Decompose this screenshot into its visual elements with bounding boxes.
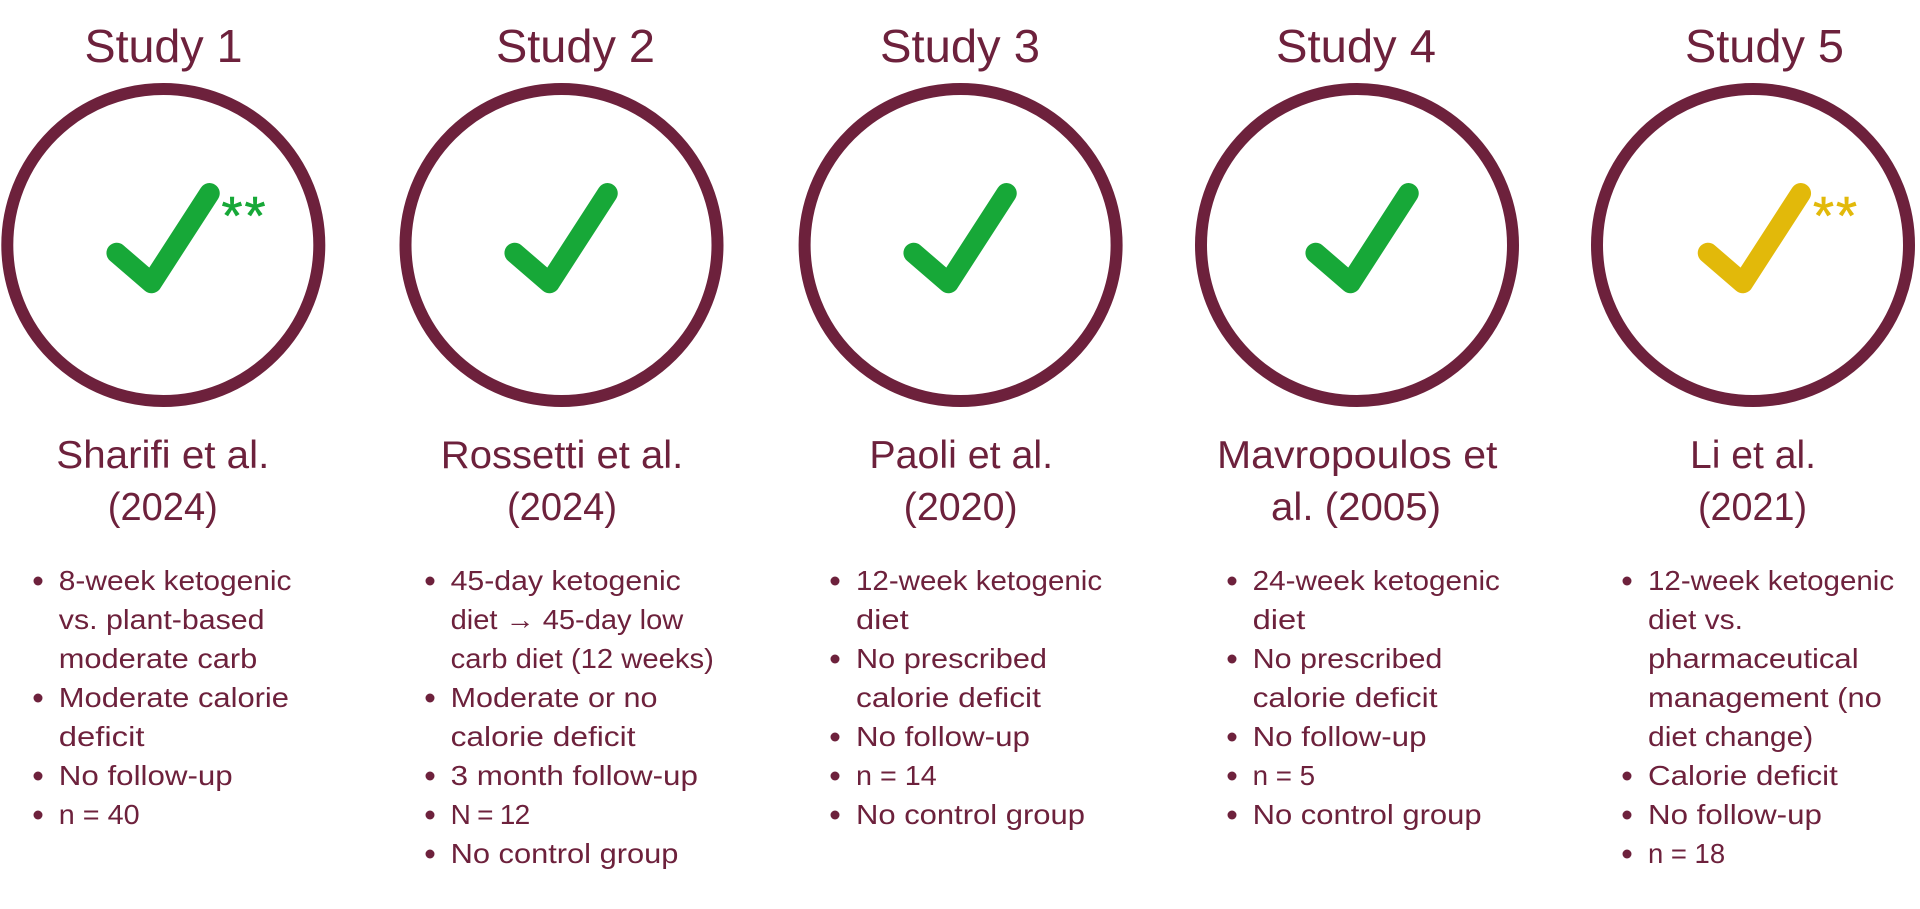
author: Paoli et al. (2020): (2020) xyxy=(904,486,1018,529)
icon: green check in ring xyxy=(805,89,1117,401)
study details list: diet vs. xyxy=(1648,604,1743,635)
study details list xyxy=(1228,565,1500,830)
study details list: diet xyxy=(1253,604,1306,635)
study details list: pharmaceutical xyxy=(1648,643,1859,674)
study details list xyxy=(34,565,292,830)
study details list: No control group xyxy=(856,799,1085,830)
study details list xyxy=(830,565,1102,830)
icon: green check in ring xyxy=(406,89,718,401)
heading: Study 4: Study 4 xyxy=(1276,20,1436,72)
study details list: No prescribed xyxy=(1253,643,1442,674)
author: Paoli et al. (2020): Paoli et al. xyxy=(869,434,1053,477)
icon: green check in ring with asterisks: ** xyxy=(222,186,266,246)
author: Sharifi et al. (2024): (2024) xyxy=(108,486,218,529)
study details list: diet change) xyxy=(1648,721,1813,752)
author: Paoli et al. (2020) xyxy=(869,434,1053,529)
study details list: No follow-up xyxy=(1253,721,1426,752)
study details list: calorie deficit xyxy=(856,682,1041,713)
study details list: n = 14 xyxy=(856,760,937,791)
author: Li et al. (2021): (2021) xyxy=(1698,486,1807,529)
icon: green check in ring xyxy=(1201,89,1513,401)
author: Li et al. (2021): Li et al. xyxy=(1690,434,1816,477)
panel: study 4 xyxy=(1201,20,1513,830)
study details list: Calorie deficit xyxy=(1648,760,1838,791)
icon: green check in ring with asterisks xyxy=(7,89,319,401)
study details list: Moderate or no xyxy=(451,682,658,713)
study details list: No follow-up xyxy=(59,760,233,791)
study details list: calorie deficit xyxy=(1253,682,1438,713)
study details list: 3 month follow-up xyxy=(451,760,698,791)
study details list: carb diet (12 weeks) xyxy=(451,643,714,674)
study details list: No follow-up xyxy=(1648,799,1822,830)
study details list: calorie deficit xyxy=(451,721,636,752)
panel: study 2 xyxy=(406,20,718,869)
icon: yellow check in ring with asterisks: ** xyxy=(1813,186,1857,246)
study details list: Moderate calorie xyxy=(59,682,289,713)
author: Rossetti et al. (2024): Rossetti et al. xyxy=(441,434,683,477)
study details list: N = 12 xyxy=(451,799,530,830)
study details list: No prescribed xyxy=(856,643,1047,674)
study details list xyxy=(426,565,714,869)
study details list: n = 5 xyxy=(1253,760,1315,791)
heading: Study 2: Study 2 xyxy=(496,20,655,72)
study details list: moderate carb xyxy=(59,643,257,674)
study details list: 12-week ketogenic xyxy=(1648,565,1894,596)
author: Rossetti et al. (2024): (2024) xyxy=(507,486,617,529)
study details list: deficit xyxy=(59,721,145,752)
author: Li et al. (2021) xyxy=(1690,434,1816,529)
author: Mavropoulos et al. (2005) xyxy=(1217,434,1498,529)
author: Mavropoulos et al. (2005): al. (2005) xyxy=(1271,486,1441,529)
author: Rossetti et al. (2024) xyxy=(441,434,683,529)
author: Mavropoulos et al. (2005): Mavropoulos et xyxy=(1217,434,1498,477)
study details list: 24-week ketogenic xyxy=(1253,565,1500,596)
study details list: 45-day ketogenic xyxy=(451,565,681,596)
panel: study 3 xyxy=(805,20,1117,830)
study details list: n = 40 xyxy=(59,799,140,830)
panel: study 1 xyxy=(7,20,319,830)
study details list: diet xyxy=(856,604,909,635)
heading: Study 1: Study 1 xyxy=(84,20,242,72)
study details list: diet → 45-day low xyxy=(451,604,684,635)
icon: yellow check in ring with asterisks xyxy=(1597,89,1909,401)
heading: Study 3: Study 3 xyxy=(880,20,1040,72)
panel: study 5 xyxy=(1597,20,1909,869)
study details list: No follow-up xyxy=(856,721,1030,752)
study details list xyxy=(1622,565,1894,869)
author: Sharifi et al. (2024) xyxy=(56,434,269,529)
study details list: vs. plant-based xyxy=(59,604,264,635)
author: Sharifi et al. (2024): Sharifi et al. xyxy=(56,434,269,477)
study details list: No control group xyxy=(451,838,678,869)
study details list: management (no xyxy=(1648,682,1882,713)
study details list: No control group xyxy=(1253,799,1482,830)
heading: Study 5: Study 5 xyxy=(1685,20,1844,72)
study details list: 8-week ketogenic xyxy=(59,565,291,596)
study details list: 12-week ketogenic xyxy=(856,565,1102,596)
study details list: n = 18 xyxy=(1648,838,1725,869)
